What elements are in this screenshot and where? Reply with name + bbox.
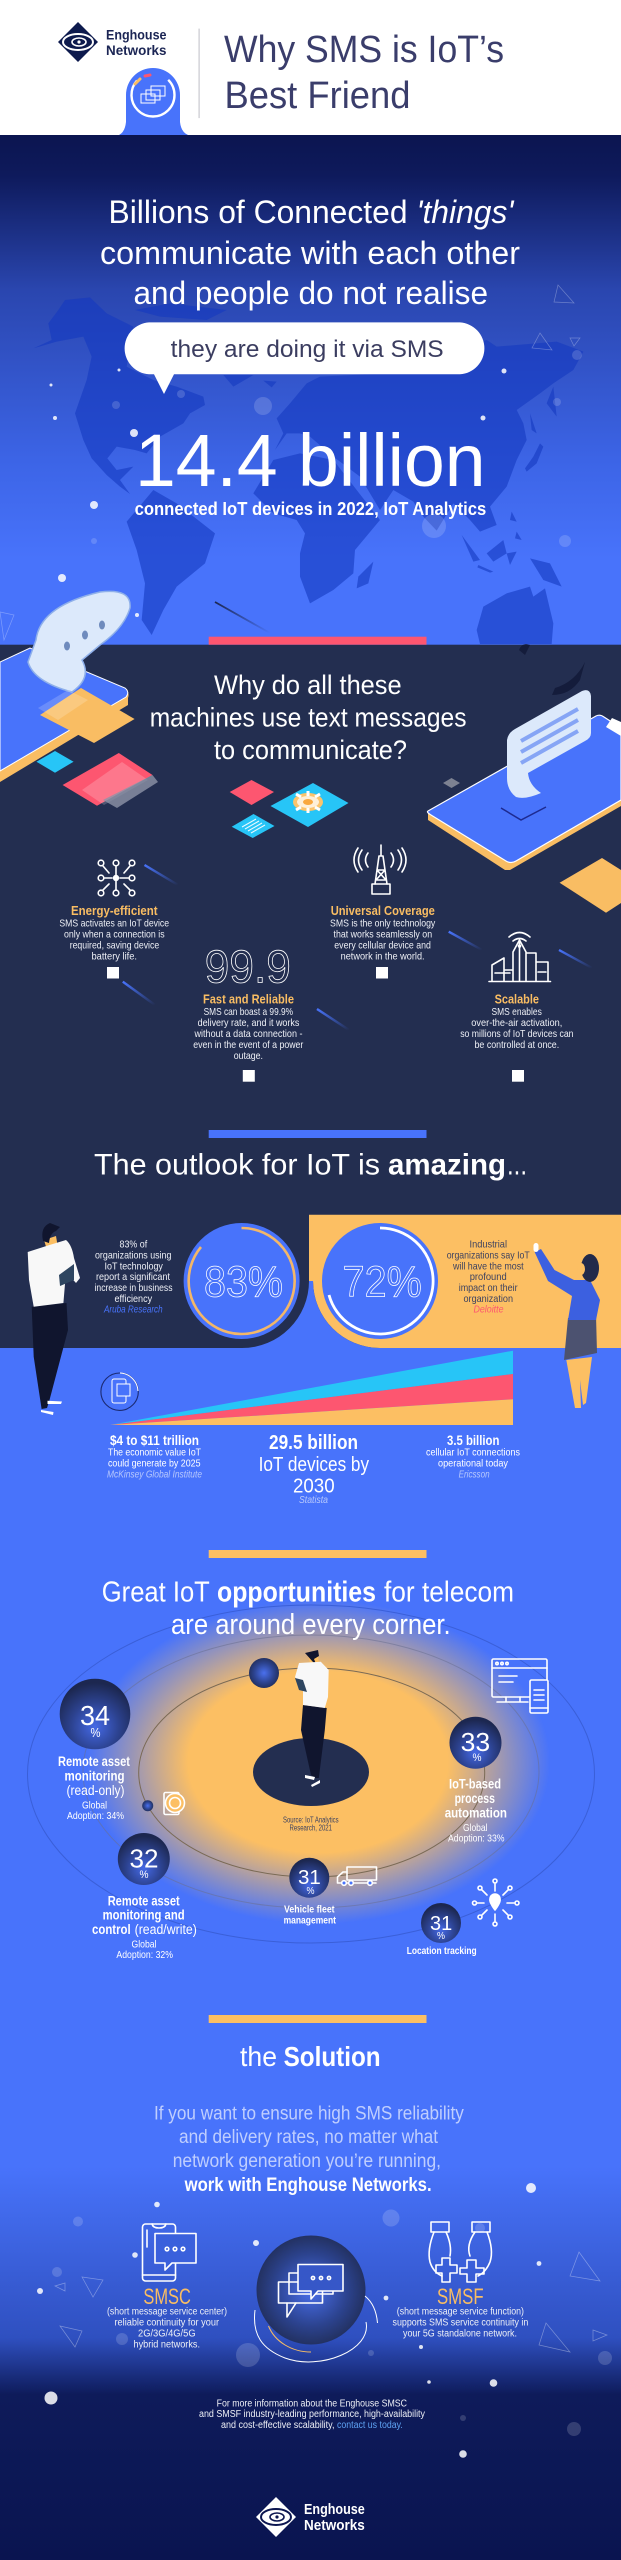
heading: why machines use text: machines use text messages bbox=[150, 703, 466, 733]
panel: outlook orange bbox=[309, 1215, 621, 1348]
heading: the Solution: the bbox=[240, 2041, 277, 2072]
logo: Enghouse Networks bbox=[58, 22, 167, 62]
feature: scalable bbox=[460, 932, 574, 1082]
title: Best Friend bbox=[224, 75, 410, 117]
stat: 29.5 billion: 29.5 billion bbox=[269, 1432, 358, 1454]
stat: 31% vehicle fleet: 31 bbox=[298, 1867, 321, 1889]
donut: 72% bbox=[322, 1223, 438, 1339]
text: 83% of organizations: increase in business bbox=[94, 1282, 172, 1294]
stat: 29.5 billion: Statista bbox=[299, 1495, 328, 1506]
background: hero gradient bbox=[0, 135, 621, 645]
source note: Source: IoT Analytics bbox=[283, 1816, 339, 1825]
stat: 29.5 billion: 2030 bbox=[293, 1476, 335, 1498]
feature: fast and reliable bbox=[193, 940, 304, 1082]
heading: the Solution: Solution bbox=[284, 2041, 381, 2072]
text: 72% industrial: will have the most bbox=[452, 1260, 524, 1272]
feature: energy-efficient: required, saving device bbox=[70, 940, 159, 952]
feature: fast and reliable: outage. bbox=[234, 1050, 263, 1062]
footer text: and SMSF industry-leading performance, high-availability bbox=[199, 2409, 425, 2420]
stat: 32% remote asset control bbox=[92, 1833, 197, 1961]
stat: 31% vehicle fleet: Vehicle fleet bbox=[284, 1903, 335, 1915]
stat: 31% location tracking: Location tracking bbox=[407, 1945, 477, 1957]
stat: 34% remote asset monitoring: Global bbox=[82, 1800, 107, 1812]
icon: circuit bbox=[98, 860, 135, 896]
feature: fast and reliable: Fast and Reliable bbox=[203, 991, 294, 1006]
text: 72% industrial bbox=[447, 1238, 530, 1316]
divider bar: orange bbox=[209, 2015, 426, 2023]
background: dark section bbox=[0, 645, 621, 1349]
feature: universal coverage bbox=[330, 845, 436, 978]
title: Why SMS is IoT’s bbox=[224, 29, 504, 71]
stat: 34% remote asset monitoring: (read-only) bbox=[66, 1783, 124, 1798]
stat: 33% process automation: Global bbox=[463, 1822, 488, 1834]
stat: 34% remote asset monitoring: monitoring bbox=[64, 1769, 124, 1784]
logo: Enghouse Networks: Enghouse bbox=[106, 27, 167, 43]
figure: woman pointing bbox=[534, 1243, 600, 1408]
feature: energy-efficient: SMS activates an IoT device bbox=[59, 918, 169, 930]
header background bbox=[0, 0, 621, 135]
headline: communicate with each other bbox=[100, 235, 520, 271]
heading: outlook: The outlook for IoT is bbox=[94, 1148, 380, 1181]
icon: location network bbox=[472, 1879, 519, 1926]
feature: fast and reliable: without a data connection - bbox=[194, 1028, 303, 1040]
text: 83% of organizations: IoT technology bbox=[104, 1260, 164, 1272]
stat: 32% remote asset control: 32 bbox=[130, 1844, 158, 1874]
speech bubble: they are doing it via SMS bbox=[125, 322, 484, 394]
ball: small orbit bbox=[142, 1800, 153, 1811]
stat: 34% remote asset monitoring: % bbox=[90, 1725, 101, 1740]
heading: the Solution bbox=[240, 2041, 381, 2072]
stat: 33% process automation: 33 bbox=[461, 1727, 490, 1757]
stat: 3.5 billion bbox=[426, 1432, 520, 1481]
figure: centre man bbox=[295, 1650, 329, 1787]
feature: scalable: Scalable bbox=[495, 991, 539, 1006]
stat: economic value: could generate by 2025 bbox=[108, 1458, 201, 1470]
icon: monitor bbox=[492, 1659, 548, 1713]
feature: fast and reliable: SMS can boast a 99.9% bbox=[204, 1006, 293, 1018]
stat: 33% process automation: Adoption: 33% bbox=[448, 1833, 504, 1845]
background: solution gradient bbox=[0, 1990, 621, 2560]
text: 72% industrial: organizations say IoT bbox=[447, 1249, 530, 1261]
stat: economic value bbox=[107, 1432, 202, 1481]
particles: hero bbox=[0, 285, 582, 640]
stat: 29.5 billion: IoT devices by bbox=[259, 1454, 369, 1476]
stat: 33% process automation bbox=[445, 1717, 507, 1845]
stat: 34% remote asset monitoring: Adoption: 34% bbox=[67, 1810, 124, 1822]
feature: universal coverage: network in the world. bbox=[341, 950, 425, 962]
heading: opportunities: for telecom bbox=[384, 1577, 514, 1609]
source note: Research, 2021 bbox=[290, 1824, 332, 1833]
stat: 31% vehicle fleet bbox=[284, 1858, 336, 1927]
stat: 31% vehicle fleet: management bbox=[284, 1915, 336, 1927]
feature: universal coverage: Universal Coverage bbox=[331, 903, 435, 918]
text: SMSF: supports SMS service continuity in bbox=[392, 2318, 528, 2329]
stat: 34% remote asset monitoring bbox=[58, 1679, 130, 1822]
donut: 83% bbox=[184, 1223, 300, 1339]
centre circle: chat bbox=[254, 2236, 378, 2362]
icon: cell tower bbox=[354, 845, 406, 894]
logo: footer: Enghouse bbox=[304, 2502, 365, 2518]
stat: 14.4 billion: connected IoT devices in 2022, IoT Analytics bbox=[135, 499, 486, 519]
stat: 3.5 billion: operational today bbox=[438, 1458, 509, 1470]
text: SMSC bbox=[107, 2284, 227, 2350]
icon: wifi city bbox=[489, 932, 550, 982]
icon: device cube bbox=[164, 1792, 184, 1814]
feature: fast and reliable: even in the event of a power bbox=[193, 1039, 304, 1051]
divider bar: blue bbox=[209, 1130, 426, 1138]
headline bbox=[100, 194, 520, 311]
feature: fast and reliable: 99.9 bbox=[205, 940, 291, 992]
feature: scalable: over-the-air activation, bbox=[471, 1017, 562, 1029]
pen stroke bbox=[215, 602, 270, 633]
logo: footer bbox=[256, 2497, 365, 2537]
stat: 3.5 billion: 3.5 billion bbox=[447, 1432, 499, 1448]
text: SMSC: 2G/3G/4G/5G bbox=[138, 2328, 196, 2340]
stat: 3.5 billion: cellular IoT connections bbox=[426, 1447, 520, 1459]
feature: universal coverage: that works seamlessly on bbox=[334, 929, 432, 941]
text: 83% of organizations: report a significant bbox=[96, 1271, 170, 1283]
stat: 31% location tracking: 31 bbox=[430, 1913, 452, 1935]
text: 72% industrial: Industrial bbox=[470, 1238, 507, 1250]
chart: growth wedge bbox=[110, 1351, 513, 1425]
text: 72% industrial: impact on their bbox=[459, 1282, 518, 1294]
stat: 32% remote asset control: monitoring and bbox=[103, 1908, 185, 1923]
illustration: centre tiles bbox=[230, 780, 348, 838]
stat: 31% location tracking: % bbox=[437, 1931, 445, 1942]
icon: phone chat circle bbox=[101, 1373, 138, 1410]
feature: universal coverage: every cellular device and bbox=[334, 940, 431, 952]
heading: opportunities: Great IoT bbox=[102, 1577, 210, 1609]
streaks bbox=[123, 865, 592, 1030]
stat: 33% process automation: process bbox=[455, 1791, 495, 1806]
stat: 32% remote asset control: Remote asset bbox=[108, 1893, 180, 1908]
text: SMSC: (short message service center) bbox=[107, 2307, 227, 2318]
world map bbox=[33, 297, 583, 644]
panel: outlook blue corner bbox=[242, 1281, 380, 1348]
feature: fast and reliable: delivery rate, and it works bbox=[198, 1017, 299, 1029]
platform ellipse bbox=[253, 1738, 369, 1806]
feature: energy-efficient: battery life. bbox=[92, 950, 137, 962]
headline: Billions of Connected 'things' bbox=[108, 194, 515, 230]
glow: orbit backdrop bbox=[86, 1600, 550, 1924]
text: solution pitch: network generation you’re running, bbox=[173, 2151, 441, 2172]
feature: energy-efficient: Energy-efficient bbox=[71, 903, 158, 918]
text: solution pitch: work with Enghouse Networks. bbox=[184, 2175, 432, 2196]
feature: universal coverage: SMS is the only technology bbox=[330, 918, 436, 930]
donut: 83%: 83% bbox=[204, 1258, 283, 1307]
stat: 29.5 billion bbox=[259, 1432, 369, 1506]
headline: and people do not realise bbox=[134, 275, 488, 311]
stat: 32% remote asset control: Adoption: 32% bbox=[116, 1949, 173, 1961]
footer text: For more information about the Enghouse SMSC bbox=[217, 2398, 407, 2409]
text: 72% industrial: organization bbox=[464, 1293, 513, 1305]
heading: opportunities: are around every corner. bbox=[171, 1609, 451, 1641]
text: 83% of organizations: efficiency bbox=[114, 1293, 153, 1305]
feature: scalable: SMS enables bbox=[492, 1006, 542, 1018]
text: 72% industrial: profound bbox=[470, 1271, 507, 1283]
stat: 33% process automation: IoT-based bbox=[449, 1777, 501, 1792]
stat: economic value: The economic value IoT bbox=[108, 1447, 201, 1459]
logo: Enghouse Networks: Networks bbox=[106, 42, 167, 58]
illustration: left phone bbox=[0, 591, 158, 808]
logo: footer: Networks bbox=[304, 2518, 365, 2534]
text: SMSF bbox=[392, 2284, 528, 2340]
stat: 32% remote asset control: (read/write) bbox=[135, 1922, 197, 1937]
footer text: contact us today. bbox=[337, 2420, 403, 2431]
stat: 33% process automation: automation bbox=[445, 1805, 507, 1820]
icon: SMSC phone chat bbox=[142, 2224, 196, 2281]
heading: outlook: amazing bbox=[388, 1148, 506, 1181]
stat: 34% remote asset monitoring: 34 bbox=[80, 1700, 110, 1731]
stat: 33% process automation: % bbox=[472, 1752, 482, 1764]
background: blue section bbox=[0, 1348, 621, 2148]
text: SMSF: your 5G standalone network. bbox=[403, 2328, 517, 2340]
footer text: and cost-effective scalability, bbox=[221, 2420, 334, 2431]
feature: scalable: be controlled at once. bbox=[474, 1039, 559, 1051]
feature: scalable: so millions of IoT devices can bbox=[460, 1028, 574, 1040]
icon: SMSF puzzle hands bbox=[429, 2222, 491, 2282]
stat: 32% remote asset control: % bbox=[140, 1869, 149, 1881]
text: solution pitch bbox=[154, 2104, 464, 2196]
figure: man with tablet bbox=[28, 1223, 80, 1415]
orbit rings bbox=[28, 1605, 594, 1943]
text: 83% of organizations: organizations using bbox=[95, 1249, 172, 1261]
stat: 32% remote asset control: Global bbox=[132, 1939, 156, 1951]
icon: header chat tab bbox=[119, 65, 188, 135]
heading: why machines use text: Why do all these bbox=[214, 670, 402, 700]
stat: 34% remote asset monitoring: Remote asset bbox=[58, 1754, 130, 1769]
text: 83% of organizations: 83% of bbox=[120, 1238, 147, 1250]
ball: top orbit bbox=[249, 1658, 279, 1688]
donut: 72%: 72% bbox=[343, 1258, 422, 1307]
icon: truck bbox=[338, 1867, 376, 1885]
text: 83% of organizations bbox=[94, 1238, 172, 1316]
feature: energy-efficient: only when a connection is bbox=[64, 929, 165, 941]
text: SMSC: reliable continuity for your bbox=[114, 2318, 220, 2329]
speech bubble: they are doing it via SMS: they are doing it via SMS bbox=[171, 336, 444, 363]
stat: 31% vehicle fleet: % bbox=[306, 1886, 315, 1897]
source note bbox=[283, 1816, 339, 1833]
heading: why machines use text bbox=[150, 670, 466, 765]
heading: opportunities bbox=[102, 1577, 514, 1641]
feature: energy-efficient bbox=[59, 860, 169, 978]
stat: 32% remote asset control: control bbox=[92, 1922, 131, 1937]
divider bar: orange bbox=[209, 1550, 426, 1558]
stat: 31% location tracking bbox=[407, 1903, 477, 1957]
footer text bbox=[199, 2398, 425, 2431]
text: solution pitch: If you want to ensure high SMS reliability bbox=[154, 2104, 464, 2124]
heading: outlook bbox=[94, 1148, 527, 1181]
heading: why machines use text: to communicate? bbox=[214, 735, 407, 765]
text: SMSC: hybrid networks. bbox=[134, 2340, 200, 2350]
text: SMSC: SMSC bbox=[143, 2284, 191, 2309]
divider bar: red bbox=[209, 637, 426, 645]
illustration: right phone bbox=[427, 644, 621, 913]
stat: 3.5 billion: Ericsson bbox=[459, 1469, 490, 1481]
text: SMSF: (short message service function) bbox=[397, 2307, 524, 2318]
text: 83% of organizations: Aruba Research bbox=[103, 1304, 163, 1316]
heading: outlook: ... bbox=[507, 1148, 527, 1181]
stat: economic value: $4 to $11 trillion bbox=[110, 1432, 199, 1448]
stat: 14.4 billion: 14.4 billion bbox=[135, 419, 486, 502]
text: 72% industrial: Deloitte bbox=[474, 1304, 504, 1316]
heading: opportunities: opportunities bbox=[217, 1577, 376, 1609]
stat: economic value: McKinsey Global Institute bbox=[107, 1469, 202, 1481]
divider bbox=[198, 29, 200, 118]
particles: solution bbox=[37, 2183, 612, 2458]
title bbox=[224, 29, 504, 117]
text: SMSF: SMSF bbox=[437, 2284, 484, 2309]
text: solution pitch: and delivery rates, no matter what bbox=[179, 2127, 439, 2148]
